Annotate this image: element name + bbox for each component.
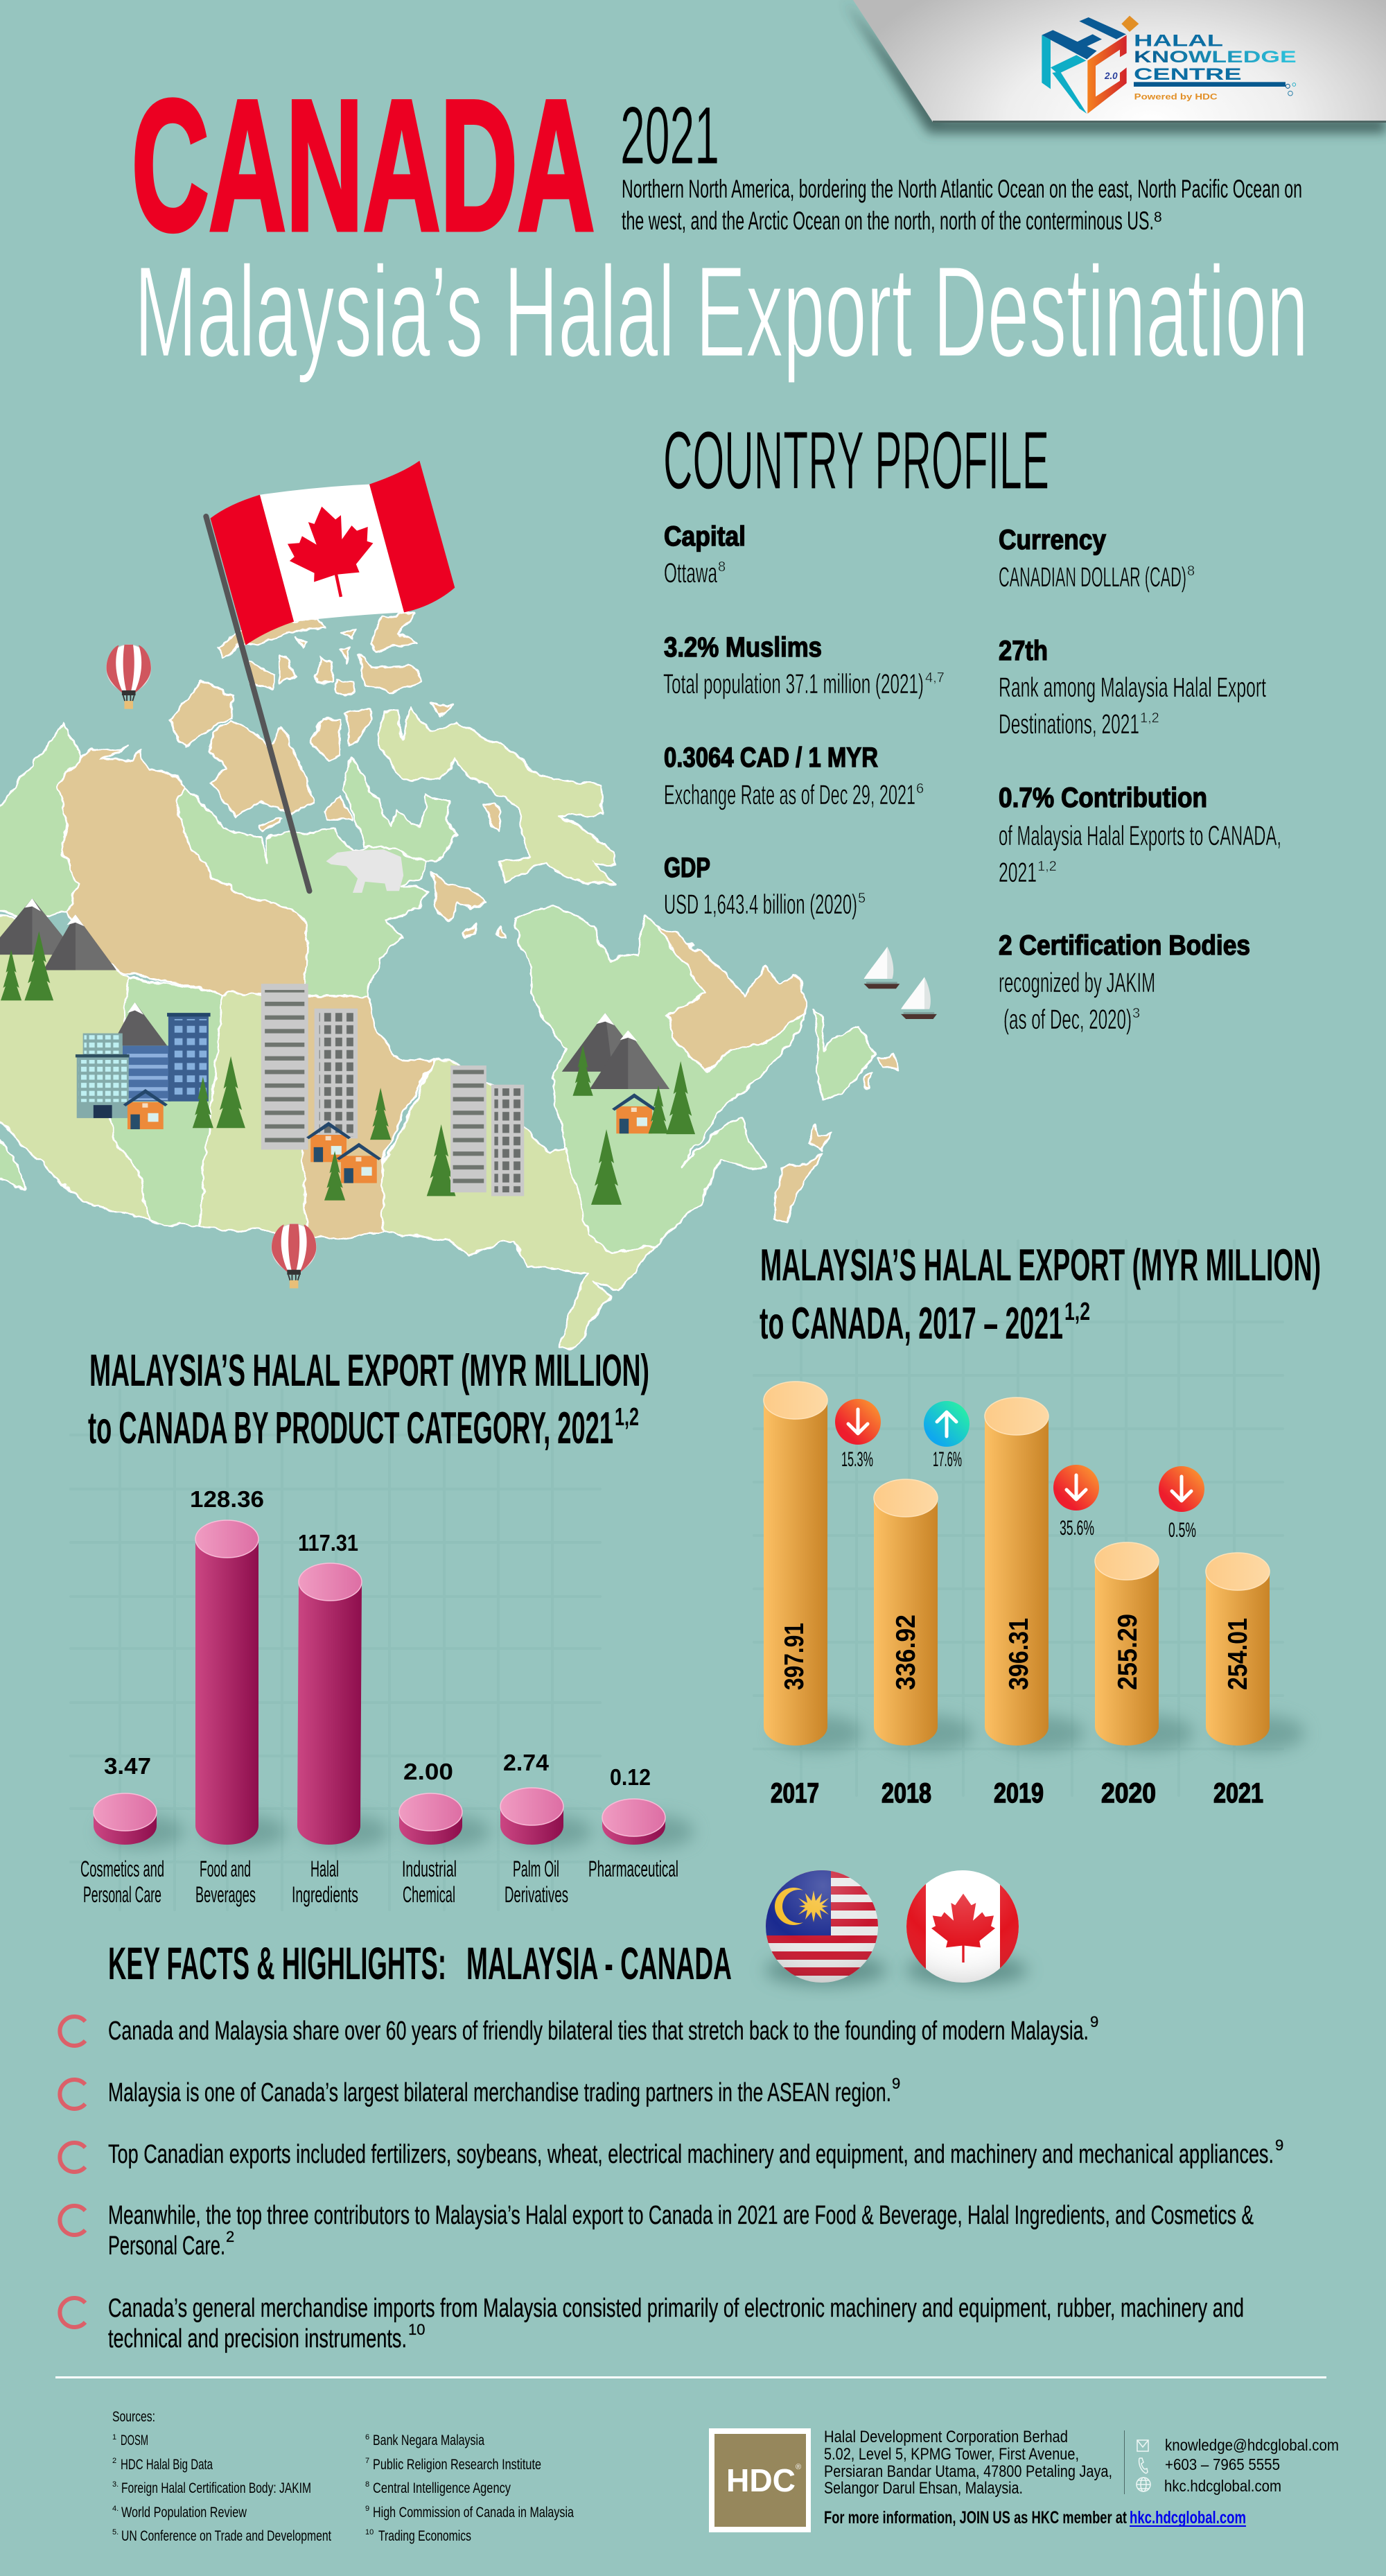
change badge: down 35.6%: 35.6% bbox=[1060, 1517, 1094, 1540]
icon: Canadian flag bbox=[211, 461, 455, 645]
bar: halal ingredients 117.31 bbox=[297, 1530, 362, 1845]
sources: HDC Halal Big Data bbox=[121, 2457, 213, 2473]
bar 2019: 396.31: 396.31 bbox=[1004, 1618, 1034, 1690]
fact: GDP: 5 bbox=[858, 891, 866, 906]
sources bbox=[112, 2409, 574, 2544]
key fact 1 bbox=[60, 2013, 1098, 2046]
logo mark: H K C cube: 2.0 bbox=[1104, 70, 1118, 81]
sources: High Commission of Canada in Malaysia bbox=[373, 2505, 574, 2521]
bar 2020: 255.29: 255.29 bbox=[1113, 1614, 1143, 1690]
fact: contribution: 0.7% Contribution bbox=[999, 783, 1207, 813]
icon: flag pole bbox=[206, 516, 309, 891]
bar 2018: 336.92: 336.92 bbox=[891, 1615, 921, 1690]
fact: capital: Ottawa bbox=[664, 558, 717, 589]
fact: exchange rate: Exchange Rate as of Dec 29, 2021 bbox=[664, 780, 915, 810]
bar shadows bbox=[773, 1715, 1305, 1751]
fact: exchange rate: 6 bbox=[916, 781, 924, 797]
icon: city centre bbox=[261, 984, 391, 1201]
key fact 1: 9 bbox=[1090, 2013, 1098, 2030]
description bbox=[622, 175, 1302, 235]
bar 2020: 255.29 bbox=[1095, 1542, 1159, 1746]
sources: Central Intelligence Agency bbox=[373, 2480, 511, 2496]
category labels: Ingredients bbox=[292, 1882, 358, 1907]
fact: currency: CANADIAN DOLLAR (CAD) bbox=[999, 562, 1186, 593]
bar: halal ingredients 117.31: 117.31 bbox=[298, 1530, 358, 1556]
sources: 9 bbox=[365, 2505, 369, 2513]
bar 2021: 254.01 bbox=[1206, 1553, 1270, 1746]
fact: contribution bbox=[999, 783, 1281, 888]
heading: key facts: KEY FACTS & HIGHLIGHTS: bbox=[108, 1938, 446, 1989]
panel: export by product category chart bbox=[71, 1345, 694, 1910]
address bbox=[824, 2428, 1112, 2498]
title: CANADA: CANADA bbox=[132, 61, 595, 269]
fact: contribution: 2021 bbox=[999, 858, 1037, 888]
icon: mountains west bbox=[0, 898, 116, 971]
chart heading: to CANADA BY PRODUCT CATEGORY, 2021 bbox=[88, 1402, 613, 1453]
change badge: down 15.3% bbox=[835, 1399, 881, 1471]
bar shadows bbox=[99, 1815, 694, 1848]
key fact 2 bbox=[60, 2075, 900, 2109]
sources: 1 bbox=[112, 2433, 116, 2442]
fact: certification bodies: (as of Dec, 2020) bbox=[1003, 1004, 1132, 1035]
bar 2017: 397.91 bbox=[764, 1382, 827, 1746]
address: Persiaran Bandar Utama, 47800 Petaling Jaya, bbox=[824, 2462, 1112, 2481]
bar: palm oil 2.74 bbox=[500, 1750, 563, 1845]
sources: 6 bbox=[365, 2433, 369, 2442]
fact: rank bbox=[999, 636, 1266, 740]
category labels: Palm Oil bbox=[513, 1856, 559, 1881]
bar 2019: 396.31 bbox=[985, 1398, 1049, 1746]
icon: city east bbox=[427, 1065, 524, 1196]
sources: Trading Economics bbox=[378, 2528, 471, 2544]
fact: exchange rate: 0.3064 CAD / 1 MYR bbox=[664, 742, 878, 773]
fact: muslims bbox=[663, 632, 945, 699]
logo mark: H K C cube bbox=[1042, 16, 1139, 114]
fact: muslims: 4,7 bbox=[925, 670, 945, 686]
fact: GDP bbox=[664, 853, 866, 920]
icon: envelope bbox=[1137, 2440, 1148, 2451]
logo wordmark: Powered by HDC bbox=[1134, 92, 1218, 101]
membership call to action: hkc.hdcglobal.com bbox=[1130, 2508, 1246, 2527]
logo wordmark: CENTRE bbox=[1134, 65, 1242, 84]
chart heading bbox=[88, 1345, 649, 1453]
bar: pharmaceutical 0.12: 0.12 bbox=[610, 1764, 651, 1790]
HDC logo: ® bbox=[796, 2463, 801, 2471]
bar: palm oil 2.74: 2.74 bbox=[503, 1750, 550, 1775]
category labels: Chemical bbox=[403, 1882, 455, 1907]
sources: 7 bbox=[365, 2457, 369, 2465]
fact: certification bodies: recognized by JAKIM bbox=[999, 968, 1155, 998]
fact: muslims: Total population 37.1 million (2021) bbox=[663, 669, 924, 699]
fact: contribution: 1,2 bbox=[1037, 859, 1057, 874]
fact: currency bbox=[999, 525, 1195, 593]
sources: DOSM bbox=[121, 2433, 148, 2448]
chart heading: 1,2 bbox=[615, 1402, 639, 1431]
icon: trees west bbox=[1, 931, 53, 1000]
chart heading: 1,2 bbox=[1064, 1297, 1090, 1325]
year 2021: 2021 bbox=[620, 90, 719, 182]
year axis labels: 2019 bbox=[994, 1778, 1044, 1809]
sources: 4. bbox=[112, 2505, 119, 2513]
fact: rank: 1,2 bbox=[1140, 711, 1159, 726]
bar: food 128.36 bbox=[190, 1486, 264, 1845]
change badge: down 0.5%: 0.5% bbox=[1168, 1519, 1196, 1542]
address: 5.02, Level 5, KPMG Tower, First Avenue, bbox=[824, 2445, 1079, 2464]
fact: capital bbox=[664, 521, 746, 589]
icon: sailboat 1 bbox=[863, 947, 900, 989]
change badge: down 0.5% bbox=[1159, 1466, 1204, 1542]
contact details: +603 – 7965 5555 bbox=[1165, 2455, 1280, 2473]
category labels: Personal Care bbox=[83, 1882, 161, 1907]
bar 2018: 336.92 bbox=[874, 1479, 938, 1746]
sources: Bank Negara Malaysia bbox=[373, 2433, 484, 2448]
change badge: down 35.6% bbox=[1053, 1465, 1099, 1540]
contact details: hkc.hdcglobal.com bbox=[1164, 2477, 1281, 2495]
chart heading bbox=[760, 1239, 1321, 1348]
fact: capital: 8 bbox=[718, 559, 726, 575]
fact: rank: Destinations, 2021 bbox=[999, 709, 1139, 740]
icon: Quebec mountains and trees bbox=[562, 1013, 695, 1205]
sources: 10 bbox=[365, 2528, 374, 2536]
fact: certification bodies bbox=[999, 930, 1250, 1035]
HDC logo bbox=[709, 2428, 811, 2532]
sources: Foreign Halal Certification Body: JAKIM bbox=[121, 2480, 311, 2496]
logo wordmark bbox=[1134, 32, 1297, 101]
year axis labels: 2020 bbox=[1101, 1778, 1156, 1809]
icon: globe bbox=[1137, 2478, 1150, 2491]
fact: capital: Capital bbox=[664, 521, 746, 552]
fact: rank: 27th bbox=[999, 636, 1048, 666]
fact: GDP: GDP bbox=[664, 853, 710, 883]
sources: 3. bbox=[112, 2480, 119, 2489]
bar: industrial chemical 2.00: 2.00 bbox=[403, 1759, 453, 1784]
category labels bbox=[80, 1856, 678, 1907]
key fact 5 bbox=[60, 2294, 1244, 2353]
logo: Halal Knowledge Centre bbox=[1042, 16, 1297, 114]
icon: city west bbox=[76, 1002, 245, 1129]
sources: 5. bbox=[112, 2528, 119, 2536]
logo wordmark: HALAL bbox=[1134, 32, 1223, 51]
map of Canada illustration bbox=[0, 461, 937, 1349]
category labels: Cosmetics and bbox=[80, 1856, 164, 1881]
change badge: down 15.3%: 15.3% bbox=[841, 1448, 873, 1471]
contact details: knowledge@hdcglobal.com bbox=[1165, 2436, 1339, 2454]
key fact 4 bbox=[60, 2201, 1254, 2261]
category labels: Halal bbox=[310, 1856, 339, 1881]
icon: balloon north bbox=[107, 645, 151, 709]
sources: World Population Review bbox=[121, 2505, 247, 2521]
banner: silver corner behind logo bbox=[844, 0, 1386, 133]
description: 8 bbox=[1154, 209, 1162, 225]
icon: sailboat 2 bbox=[901, 977, 937, 1019]
year axis labels bbox=[771, 1778, 1263, 1809]
key fact 2: 9 bbox=[892, 2075, 900, 2092]
sources: Sources: bbox=[112, 2409, 155, 2425]
key fact 4: Personal Care. bbox=[108, 2231, 225, 2261]
sources: 8 bbox=[365, 2480, 369, 2489]
logo wordmark: KNOWLEDGE bbox=[1134, 48, 1297, 67]
key fact 4: 2 bbox=[226, 2228, 234, 2245]
category labels: Beverages bbox=[195, 1882, 256, 1907]
fact: GDP: USD 1,643.4 billion (2020) bbox=[664, 889, 857, 920]
fact: currency: Currency bbox=[999, 525, 1107, 555]
sources: UN Conference on Trade and Development bbox=[121, 2528, 331, 2544]
category labels: Industrial bbox=[402, 1856, 457, 1881]
sources: Public Religion Research Institute bbox=[373, 2457, 541, 2473]
year axis labels: 2021 bbox=[1213, 1778, 1263, 1809]
icon: phone bbox=[1139, 2458, 1148, 2473]
membership call to action: For more information, JOIN US as HKC member at bbox=[824, 2508, 1127, 2527]
chart heading: MALAYSIA’S HALAL EXPORT (MYR MILLION) bbox=[89, 1345, 649, 1395]
fact: muslims: 3.2% Muslims bbox=[664, 632, 822, 663]
panel: country profile bbox=[663, 415, 1281, 1035]
change badge: up 17.6% bbox=[924, 1401, 970, 1471]
key fact 5: technical and precision instruments. bbox=[108, 2324, 407, 2353]
year axis labels: 2018 bbox=[881, 1778, 931, 1809]
panel: export by year chart bbox=[754, 1239, 1321, 1809]
chart heading: to CANADA, 2017 – 2021 bbox=[760, 1298, 1063, 1348]
bar: food 128.36: 128.36 bbox=[190, 1486, 264, 1512]
icon: Canada flag ball bbox=[901, 1868, 1028, 1986]
fact: exchange rate bbox=[664, 742, 924, 810]
category labels: Pharmaceutical bbox=[588, 1856, 678, 1881]
category labels: Food and bbox=[200, 1856, 251, 1881]
bar 2017: 397.91: 397.91 bbox=[780, 1623, 809, 1690]
bar: industrial chemical 2.00 bbox=[399, 1759, 462, 1845]
change badge: up 17.6%: 17.6% bbox=[933, 1448, 962, 1471]
bar: cosmetics 3.47: 3.47 bbox=[104, 1753, 151, 1779]
key fact 5: 10 bbox=[408, 2321, 425, 2338]
bar: pharmaceutical 0.12 bbox=[602, 1764, 665, 1845]
key fact 3: 9 bbox=[1275, 2136, 1283, 2154]
icon: Malaysia flag ball bbox=[762, 1868, 887, 1986]
sources: 2 bbox=[112, 2457, 116, 2465]
contact details bbox=[1137, 2436, 1339, 2495]
bar: cosmetics 3.47 bbox=[94, 1753, 157, 1845]
HDC logo: HDC bbox=[726, 2462, 796, 2498]
year axis labels: 2017 bbox=[771, 1778, 819, 1809]
category labels: Derivatives bbox=[505, 1882, 568, 1907]
icon: balloon south bbox=[272, 1224, 316, 1288]
fact: certification bodies: 2 Certification Bodies bbox=[999, 930, 1250, 961]
icon: polar bear bbox=[326, 849, 403, 893]
address: Selangor Darul Ehsan, Malaysia. bbox=[824, 2479, 1023, 2498]
key fact 2: Malaysia is one of Canada’s largest bilateral merchandise trading partners in the ASEAN region. bbox=[108, 2078, 891, 2107]
bar 2021: 254.01: 254.01 bbox=[1223, 1618, 1253, 1690]
map regions bbox=[0, 612, 897, 1349]
fact: certification bodies: 3 bbox=[1132, 1006, 1140, 1021]
fact: currency: 8 bbox=[1187, 564, 1195, 579]
address: Halal Development Corporation Berhad bbox=[824, 2428, 1068, 2446]
heading: key facts: MALAYSIA - CANADA bbox=[466, 1938, 732, 1989]
